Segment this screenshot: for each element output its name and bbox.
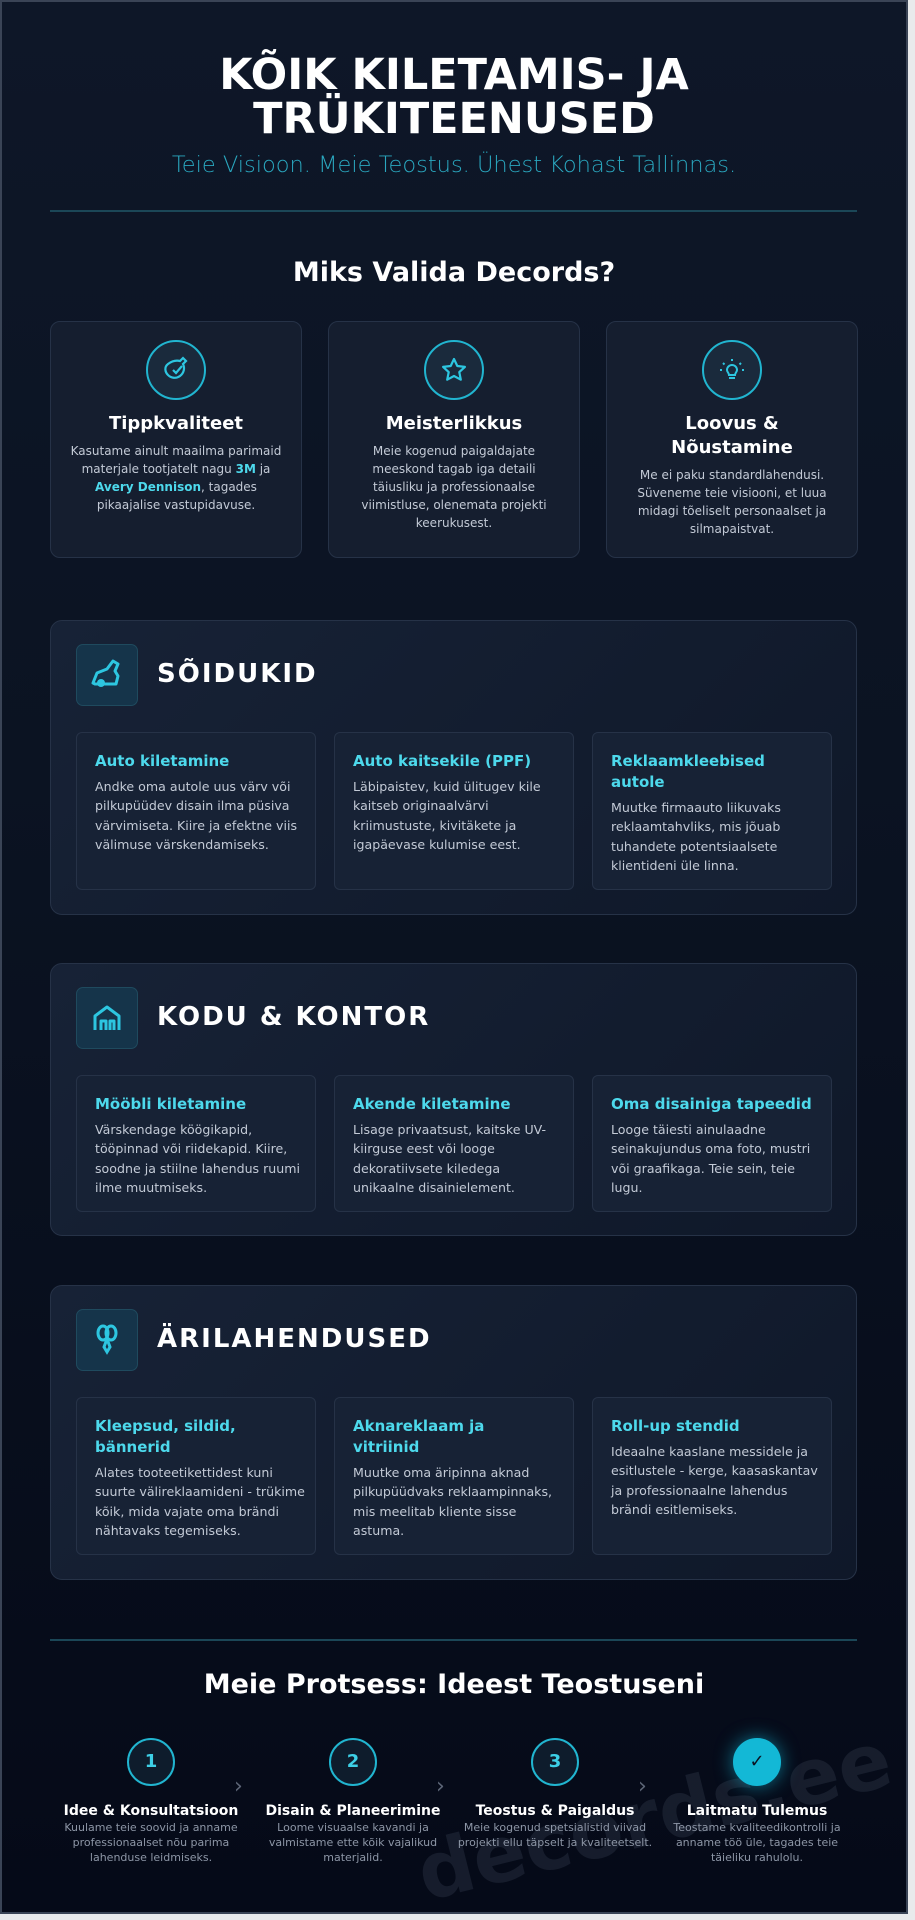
card: Meisterlikkus: Meie kogenud paigaldajate meeskond tagab iga detaili täiusliku ja professionaalse viimistluse, olenemata projekti keerukusest. xyxy=(361,444,547,530)
panel: Sõidukid: Reklaamkleebised xyxy=(611,752,765,770)
card: Loovus: Loovus & xyxy=(685,413,779,434)
watermark: decords.ee xyxy=(408,1715,900,1914)
step 2 xyxy=(266,1738,440,1864)
card: Meisterlikkus: Meisterlikkus xyxy=(386,413,522,434)
text: 2 xyxy=(347,1751,359,1772)
icon: business xyxy=(76,1309,138,1371)
panel: Ärilahendused: Alates tooteetikettidest kuni suurte välireklaamideni - trükime kõik, mida vajate oma brändi nähtavaks tegemiseks. xyxy=(95,1465,305,1538)
panel: Kodu & Kontor xyxy=(50,963,857,1236)
title xyxy=(219,49,689,144)
heading: SÕIDUKID xyxy=(157,659,318,689)
card: Loovus: Me ei paku standardlahendusi. Süveneme teie visiooni, et luua midagi tõeliselt personaalset ja silmapaistvat. xyxy=(637,468,827,536)
panel: Kodu & Kontor: Mööbli kiletamine xyxy=(95,1095,246,1113)
text: Disain & Planeerimine xyxy=(266,1803,440,1819)
panel: Ärilahendused: Aknareklaam ja xyxy=(353,1417,484,1435)
title: KÕIK KILETAMIS- JA xyxy=(219,50,689,100)
heading: ÄRILAHENDUSED xyxy=(157,1324,432,1354)
heading: process: Meie Protsess: Ideest Teostuseni xyxy=(204,1669,704,1700)
panel: Kodu & Kontor: Oma disainiga tapeedid xyxy=(611,1095,812,1113)
arrow: › xyxy=(638,1774,647,1799)
step 1 xyxy=(64,1738,238,1864)
heading: why decords: Miks Valida Decords? xyxy=(293,257,615,288)
card: Tippkvaliteet xyxy=(50,321,302,558)
subtitle: Teie Visioon. Meie Teostus. Ühest Kohast Tallinnas. xyxy=(172,152,736,178)
panel: Sõidukid: Auto kaitsekile (PPF) xyxy=(353,752,531,770)
panel: Ärilahendused xyxy=(50,1285,857,1580)
panel: Sõidukid: Auto kiletamine xyxy=(95,752,229,770)
text: Loome visuaalse kavandi ja valmistame ette kõik vajalikud materjalid. xyxy=(269,1821,437,1864)
card: Tippkvaliteet: Kasutame ainult maailma parimaid materjale tootjatelt nagu 3M ja Avery Dennison, tagades pikaajalise vastupidavuse. xyxy=(71,444,281,512)
text: Meie kogenud spetsialistid viivad projekti ellu täpselt ja kvaliteetselt. xyxy=(458,1821,652,1849)
panel: Ärilahendused: Ideaalne kaaslane messidele ja esitlustele - kerge, kaasaskantav ja professionaalne lahendus brändi esitlemiseks. xyxy=(611,1444,818,1517)
panel: Ärilahendused: bännerid xyxy=(95,1438,171,1456)
panel: Sõidukid: Muutke firmaauto liikuvaks reklaamtahvliks, mis jõuab tuhandete potentsiaalsete klientideni üle linna. xyxy=(611,800,781,873)
icon: house xyxy=(76,987,138,1049)
text: Teostame kvaliteedikontrolli ja anname töö üle, tagades teie täieliku rahulolu. xyxy=(673,1821,841,1864)
panel: Sõidukid: Andke oma autole uus värv või pilkupüüdev disain ilma püsiva värvimiseta. Kiire ja efektne viis välimuse värskendamiseks. xyxy=(95,779,297,852)
arrow: › xyxy=(234,1774,243,1799)
arrow: › xyxy=(436,1774,445,1799)
panel: Ärilahendused: Roll-up stendid xyxy=(611,1417,740,1435)
panel: Ärilahendused: Kleepsud, sildid, xyxy=(95,1417,236,1435)
text: 3 xyxy=(549,1751,561,1772)
panel: Kodu & Kontor: Looge täiesti ainulaadne seinakujundus oma foto, mustri või graafikaga. Teie sein, teie lugu. xyxy=(611,1122,810,1195)
card: Tippkvaliteet: Tippkvaliteet xyxy=(109,413,243,434)
icon: shield xyxy=(146,340,206,400)
panel: Sõidukid: Läbipaistev, kuid ülitugev kile kaitseb originaalvärvi kriimustuste, kivitäkete ja igapäevase kulumise eest. xyxy=(353,779,541,852)
panel: Ärilahendused: vitriinid xyxy=(353,1438,419,1456)
text: ✓ xyxy=(749,1751,765,1772)
icon: star xyxy=(424,340,484,400)
card: Loovus xyxy=(606,321,858,558)
text: Teostus & Paigaldus xyxy=(476,1803,634,1819)
panel: Kodu & Kontor: Lisage privaatsust, kaitske UV-kiirguse eest või looge dekoratiivsete kiledega unikaalne disainielement. xyxy=(353,1122,546,1195)
step 3 xyxy=(458,1738,652,1849)
heading: KODU & KONTOR xyxy=(157,1002,430,1032)
panel: Sõidukid: autole xyxy=(611,773,665,791)
panel: Kodu & Kontor: Värskendage köögikapid, tööpinnad või riidekapid. Kiire, soodne ja stiilne lahendus ruumi ilme muutmiseks. xyxy=(95,1122,300,1195)
text: 1 xyxy=(145,1751,157,1772)
panel: Sõidukid xyxy=(50,620,857,915)
step 4 xyxy=(673,1727,841,1864)
panel: Kodu & Kontor: Akende kiletamine xyxy=(353,1095,511,1113)
text: Kuulame teie soovid ja anname professionaalset nõu parima lahenduse leidmiseks. xyxy=(64,1821,238,1864)
text: Laitmatu Tulemus xyxy=(687,1803,827,1819)
icon: bulb xyxy=(702,340,762,400)
panel: Ärilahendused: Muutke oma äripinna aknad pilkupüüdvaks reklaampinnaks, mis meelitab kliente sisse astuma. xyxy=(353,1465,552,1538)
card: Loovus: Nõustamine xyxy=(671,437,793,458)
icon: car xyxy=(76,644,138,706)
title: TRÜKITEENUSED xyxy=(253,94,655,144)
text: Idee & Konsultatsioon xyxy=(64,1803,238,1819)
card: Meisterlikkus xyxy=(328,321,580,558)
